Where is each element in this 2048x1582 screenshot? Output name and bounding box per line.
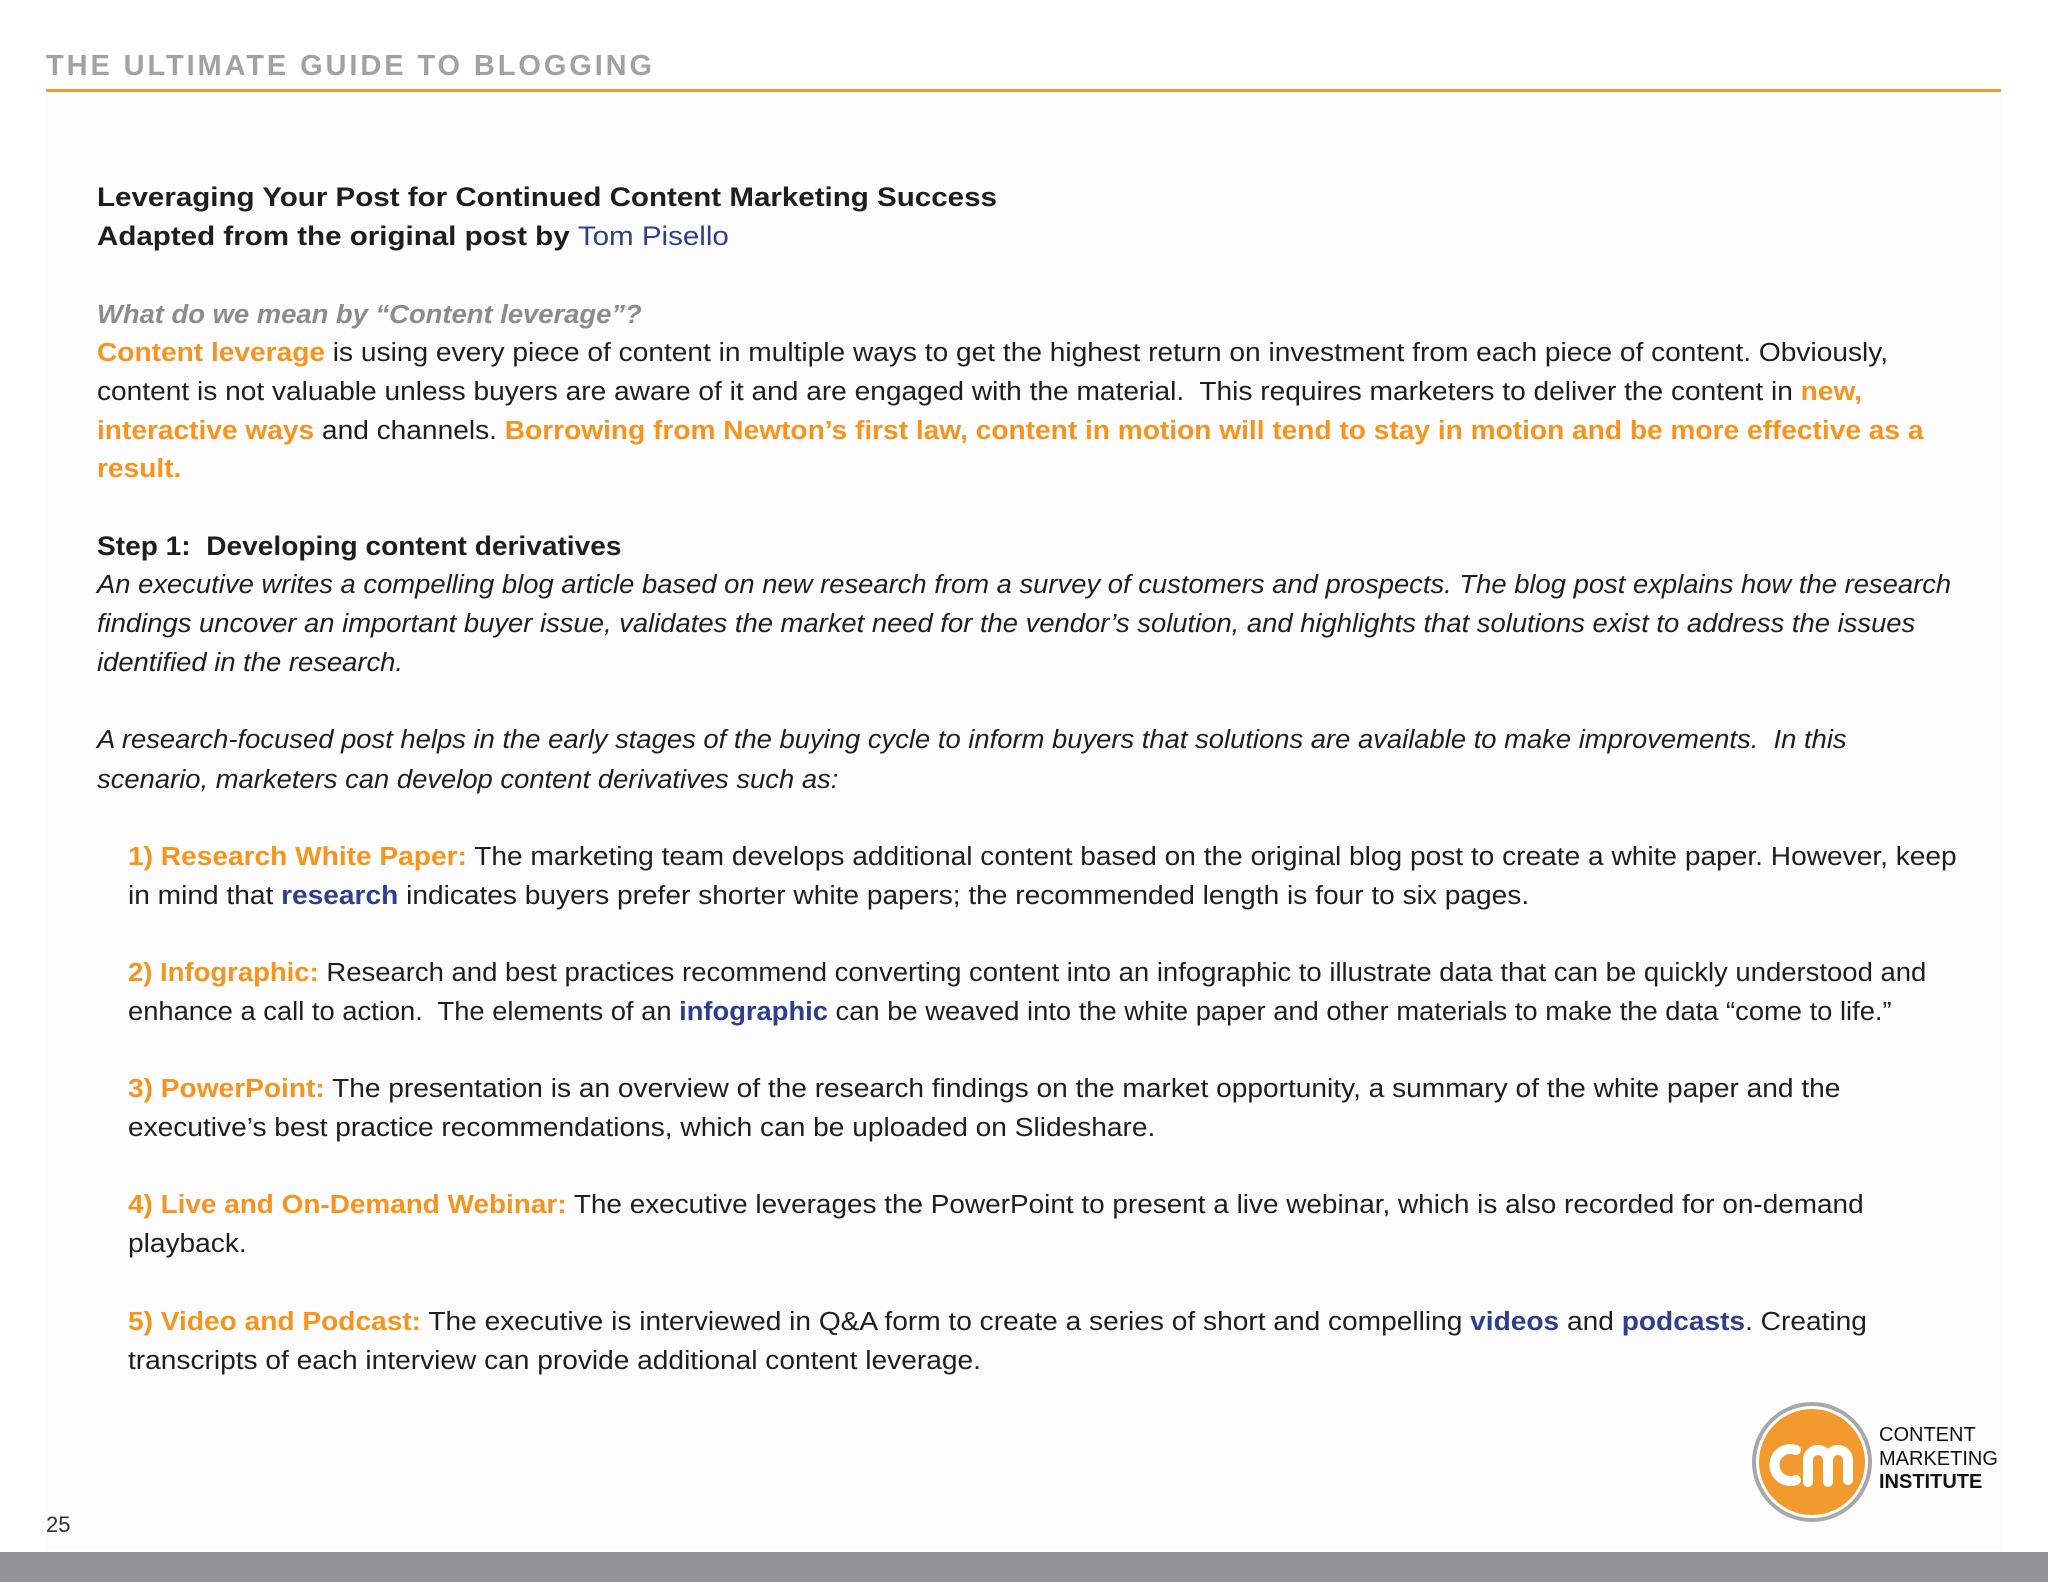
item 1: research white paper: 1) Research White Paper: The marketing team develops additional content based on the original blog post to create a white paper. However, keep — [128, 843, 1957, 871]
intro paragraph: Content leverage is using every piece of content in multiple ways to get the highest return on investment from each piece of content. Obviously, — [97, 339, 1888, 367]
logo text: CONTENT — [1879, 1424, 1976, 1446]
item 4: webinar: playback. — [128, 1230, 247, 1258]
item 4: webinar: 4) Live and On-Demand Webinar: The executive leverages the PowerPoint to present a live webinar, which is also recorded for on-demand — [128, 1191, 1864, 1219]
logo text: MARKETING — [1879, 1448, 1998, 1470]
item 2: infographic — [128, 959, 1926, 1026]
footer bar — [0, 1552, 2048, 1582]
item 5: video and podcast — [128, 1308, 1867, 1375]
step 1 paragraph: findings uncover an important buyer issue, validates the market need for the vendor’s solution, and highlights that solutions exist to address the issues — [97, 610, 1915, 638]
item 1: research white paper — [128, 843, 1957, 910]
logo: content marketing institute — [1752, 1402, 1998, 1522]
page number: 25 — [46, 1512, 70, 1537]
item 3: powerpoint: 3) PowerPoint: The presentation is an overview of the research findings on the market opportunity, a summary of the white paper and the — [128, 1075, 1840, 1103]
step 1 heading: Step 1: Developing content derivatives — [97, 531, 621, 561]
logo text: INSTITUTE — [1879, 1471, 1982, 1493]
header title: THE ULTIMATE GUIDE TO BLOGGING — [46, 50, 655, 82]
byline: Adapted from the original post by Tom Pisello — [97, 221, 729, 251]
item 3: powerpoint — [128, 1075, 1840, 1142]
item 3: powerpoint: executive’s best practice recommendations, which can be uploaded on Slideshare. — [128, 1114, 1155, 1142]
intro paragraph: content is not valuable unless buyers are aware of it and are engaged with the material. This requires marketers to deliver the content in new, — [97, 378, 1862, 406]
item 5: video and podcast: 5) Video and Podcast: The executive is interviewed in Q&A form to create a series of short and compelling videos and podcasts. Creating — [128, 1308, 1867, 1336]
step 1 paragraph: A research-focused post helps in the early stages of the buying cycle to inform buyers that solutions are available to make improvements. In this — [97, 726, 1847, 754]
item 4: webinar — [128, 1191, 1864, 1258]
step 1 paragraph — [96, 571, 1951, 794]
item 5: video and podcast: transcripts of each interview can provide additional content leverage. — [128, 1347, 981, 1375]
item 2: infographic: enhance a call to action. The elements of an infographic can be weaved into the white paper and other materials to make the data “come to life.” — [128, 998, 1892, 1026]
header rule — [46, 89, 2001, 92]
article title: Leveraging Your Post for Continued Content Marketing Success — [97, 182, 997, 212]
icon: cm circle — [1752, 1402, 1872, 1522]
logo text — [1879, 1424, 1998, 1493]
step 1 paragraph: identified in the research. — [97, 649, 403, 677]
intro paragraph: result. — [97, 455, 181, 483]
step 1 paragraph: An executive writes a compelling blog article based on new research from a survey of customers and prospects. The blog post explains how the research — [97, 571, 1951, 599]
intro paragraph — [97, 339, 1924, 483]
intro question: What do we mean by “Content leverage”? — [97, 301, 642, 329]
item 1: research white paper: in mind that research indicates buyers prefer shorter white papers; the recommended length is four to six pages. — [128, 882, 1529, 910]
step 1 paragraph: scenario, marketers can develop content derivatives such as: — [97, 766, 838, 794]
item 2: infographic: 2) Infographic: Research and best practices recommend converting content into an infographic to illustrate data that can be quickly understood and — [128, 959, 1926, 987]
intro paragraph: interactive ways and channels. Borrowing from Newton’s first law, content in motion will tend to stay in motion and be more effective as a — [97, 417, 1923, 445]
